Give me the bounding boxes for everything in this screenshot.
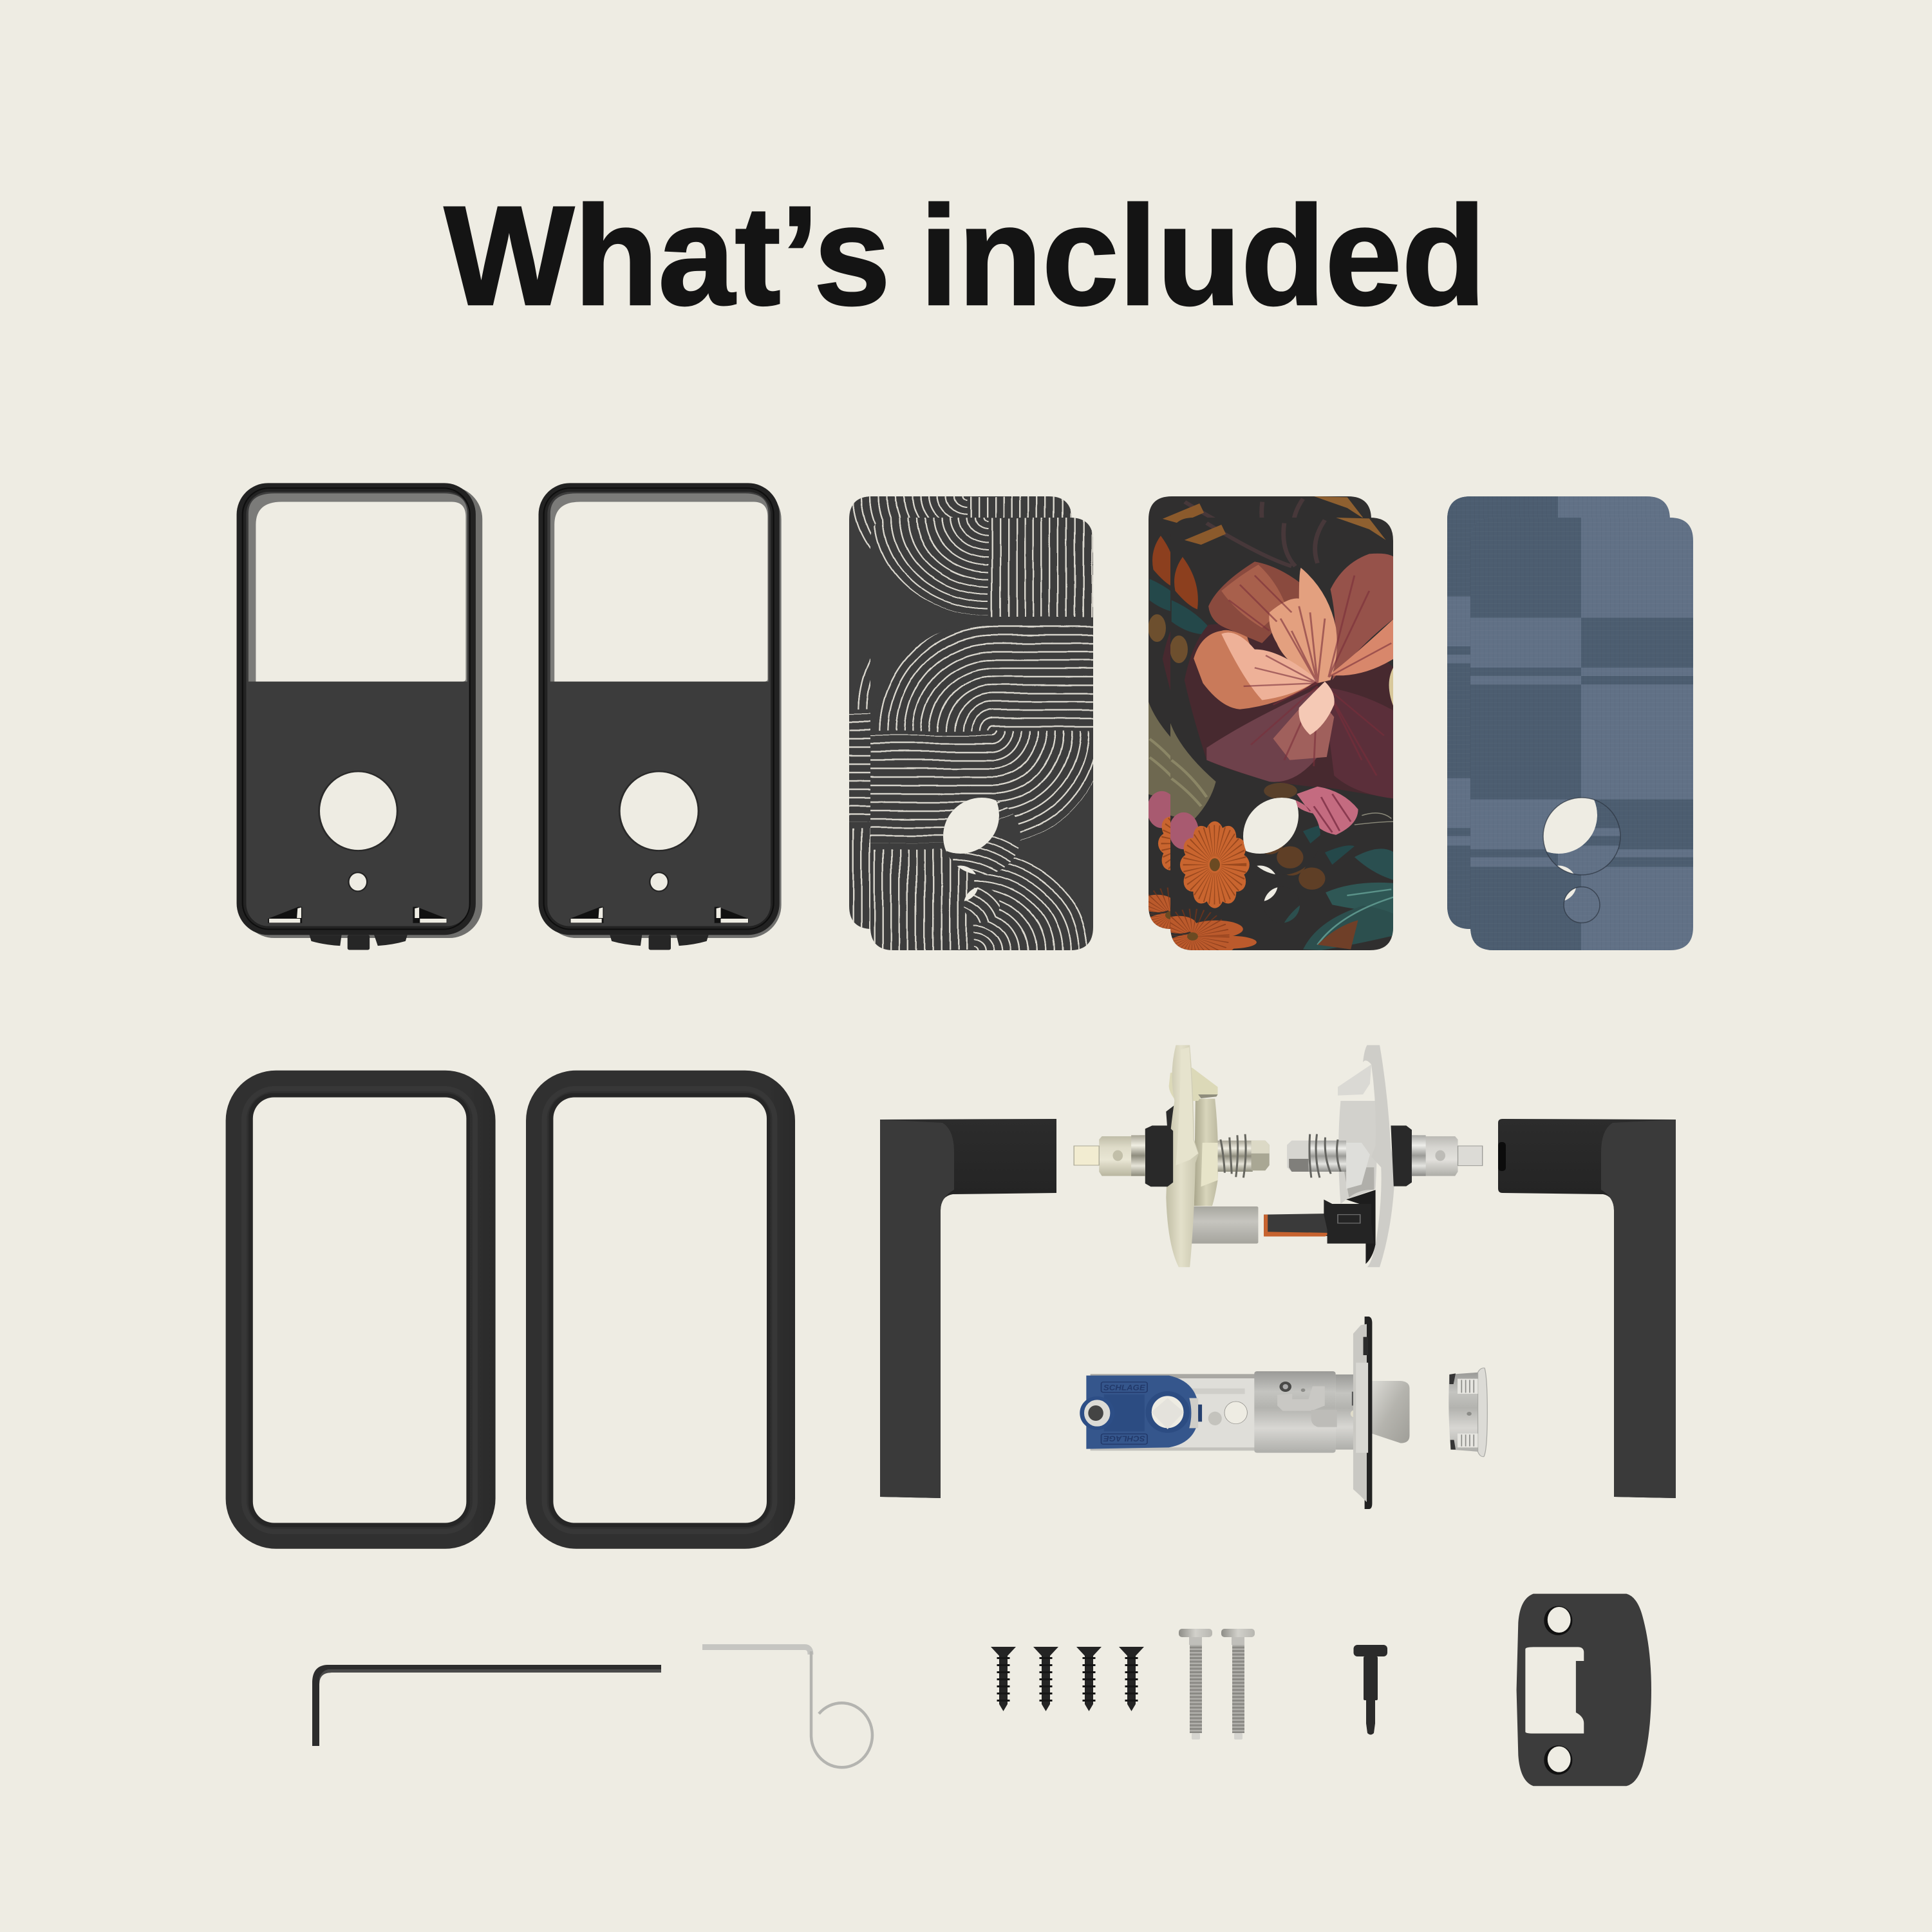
dial hole	[319, 771, 397, 850]
spindle tip	[1458, 1146, 1483, 1166]
right clip	[715, 907, 749, 923]
lower screw hole	[1544, 1745, 1572, 1775]
black inner plate	[1346, 1190, 1376, 1264]
front faceplate	[870, 518, 1105, 950]
bottom tabs	[610, 935, 709, 950]
rubber seal 2	[526, 1071, 795, 1549]
orange connector	[1264, 1199, 1374, 1244]
spindle tip	[1074, 1146, 1099, 1165]
collar	[1346, 1143, 1370, 1189]
hex spindle	[1099, 1135, 1145, 1176]
SCHLAGE mark bottom: SCHLAGE	[1103, 1434, 1145, 1443]
back faceplate	[1140, 496, 1372, 935]
left clip	[268, 907, 302, 923]
spring shaft	[1218, 1134, 1253, 1177]
hex end	[1287, 1141, 1308, 1172]
right clip	[413, 907, 447, 923]
machine bolts	[1179, 1629, 1255, 1740]
dial hole	[619, 771, 699, 850]
blue plastic clip	[1082, 1376, 1202, 1449]
left lever handle	[880, 1119, 1056, 1498]
collar	[1201, 1143, 1218, 1186]
hole rims	[1543, 798, 1620, 923]
hex spindle	[1412, 1135, 1458, 1176]
screw 2	[1033, 1647, 1058, 1711]
hex end	[1252, 1141, 1270, 1170]
title: What’s included	[444, 178, 1486, 335]
panel: line-art faceplates	[849, 496, 1105, 950]
black gasket	[1166, 1104, 1179, 1131]
latch bolt	[1372, 1381, 1409, 1443]
right lever handle	[1498, 1119, 1676, 1498]
small hole	[348, 872, 367, 891]
upper screw hole	[1544, 1606, 1572, 1635]
small hole	[650, 872, 668, 891]
cylinder	[1254, 1371, 1360, 1453]
spring shaft	[1308, 1134, 1346, 1177]
mounting plate	[1166, 1045, 1199, 1267]
bottom tabs	[310, 935, 408, 950]
wire pull tool	[702, 1647, 872, 1767]
grey cylinder	[1190, 1206, 1258, 1244]
front faceplate	[1161, 518, 1394, 957]
latch ring	[1449, 1368, 1487, 1457]
SCHLAGE mark top: SCHLAGE	[1103, 1383, 1146, 1392]
back faceplate	[1447, 496, 1670, 929]
screw 3	[1076, 1647, 1102, 1711]
triangular flange	[1338, 1064, 1371, 1096]
black nut	[1391, 1125, 1412, 1186]
triangular flange	[1169, 1067, 1218, 1101]
panel: floral faceplates	[1140, 496, 1394, 957]
bolt 2	[1221, 1629, 1255, 1740]
window opening	[256, 502, 465, 682]
frame 1: backplate frame	[237, 483, 482, 950]
black pin screw	[1353, 1645, 1387, 1734]
window opening	[554, 502, 767, 682]
strike plate	[1517, 1594, 1651, 1786]
hex key	[312, 1665, 661, 1746]
key ring	[1082, 1398, 1112, 1428]
screw 4	[1119, 1647, 1144, 1711]
screw 1	[991, 1647, 1016, 1711]
bolt 1	[1179, 1629, 1212, 1740]
mounting plate	[1363, 1045, 1395, 1267]
left lock assembly (champagne)	[1074, 1045, 1270, 1267]
left clip	[570, 907, 604, 923]
back faceplate	[849, 496, 1083, 929]
body	[1338, 1101, 1377, 1204]
panel: blue plaid faceplates	[1447, 496, 1693, 950]
steel case	[1091, 1374, 1255, 1450]
front faceplate	[1470, 518, 1693, 950]
rubber seal 1	[226, 1071, 496, 1549]
right lock assembly (silver)	[1264, 1045, 1483, 1267]
faceplate	[1353, 1317, 1372, 1509]
black nut	[1145, 1125, 1173, 1186]
body	[1194, 1099, 1218, 1206]
latch window	[1525, 1647, 1584, 1734]
black wood screws	[991, 1647, 1144, 1711]
latch assembly	[1082, 1317, 1487, 1509]
frame 2: backplate frame	[539, 483, 782, 950]
